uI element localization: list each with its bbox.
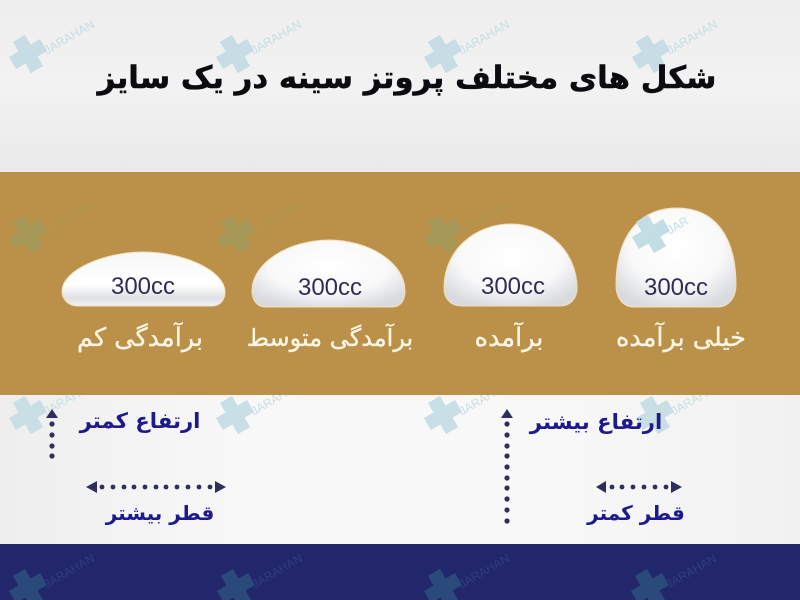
label: low profile: برآمدگی کم	[77, 322, 203, 353]
arrow: wide diameter	[86, 481, 226, 493]
watermark row 4	[9, 554, 716, 600]
watermark row 4: JARAHAN	[663, 551, 719, 591]
watermark row 3	[9, 395, 709, 434]
label: high profile: برآمده	[475, 322, 543, 353]
implant: high profile	[444, 224, 577, 306]
implant: high profile: 300cc	[481, 273, 545, 300]
text: greater height: ارتفاع بیشتر	[529, 409, 662, 434]
watermark row 1	[3, 2, 722, 79]
implant: moderate profile	[252, 240, 405, 307]
label: moderate profile: برآمدگی متوسط	[247, 323, 413, 352]
watermark row 3: JARAHAN	[41, 378, 97, 418]
implant: low profile	[62, 252, 225, 306]
background: top area	[0, 0, 800, 172]
watermark over extra high implant: JAR	[664, 214, 691, 237]
watermark row 2: JARAHAN	[456, 197, 512, 237]
text: larger diameter: قطر بیشتر	[105, 501, 214, 525]
watermark row 4: JARAHAN	[456, 551, 512, 591]
label: extra high profile: خیلی برآمده	[616, 322, 746, 353]
arrow: short height	[46, 409, 58, 459]
watermark row 2: JARAHAN	[249, 197, 305, 237]
title: شکل های مختلف پروتز سینه در یک سایز	[96, 60, 716, 96]
watermark row 3: JARAHAN	[668, 378, 724, 418]
watermark row 3: JARAHAN	[248, 378, 304, 418]
watermark row 1: JARAHAN	[248, 17, 304, 57]
watermark row 4: JARAHAN	[249, 551, 305, 591]
watermark row 1: JARAHAN	[664, 17, 720, 57]
arrow: tall height	[501, 409, 513, 524]
implant: moderate profile: 300cc	[298, 274, 362, 301]
watermark row 2	[3, 182, 514, 259]
text: lower height: ارتفاع کمتر	[79, 408, 200, 433]
background: gold band	[0, 172, 800, 395]
implant: extra high profile	[616, 208, 736, 307]
watermark over extra high implant	[626, 199, 694, 259]
background: navy footer band	[0, 544, 800, 600]
watermark row 4: JARAHAN	[41, 551, 97, 591]
watermark row 1: JARAHAN	[456, 17, 512, 57]
text: smaller diameter: قطر کمتر	[586, 501, 685, 525]
implant: extra high profile: 300cc	[644, 274, 708, 301]
background: lower white area	[0, 395, 800, 544]
watermark row 1: JARAHAN	[41, 17, 97, 57]
implant: low profile: 300cc	[111, 273, 175, 300]
arrow: narrow diameter	[596, 481, 682, 493]
watermark row 3: JARAHAN	[456, 378, 512, 418]
watermark row 2: JARAHAN	[41, 197, 97, 237]
